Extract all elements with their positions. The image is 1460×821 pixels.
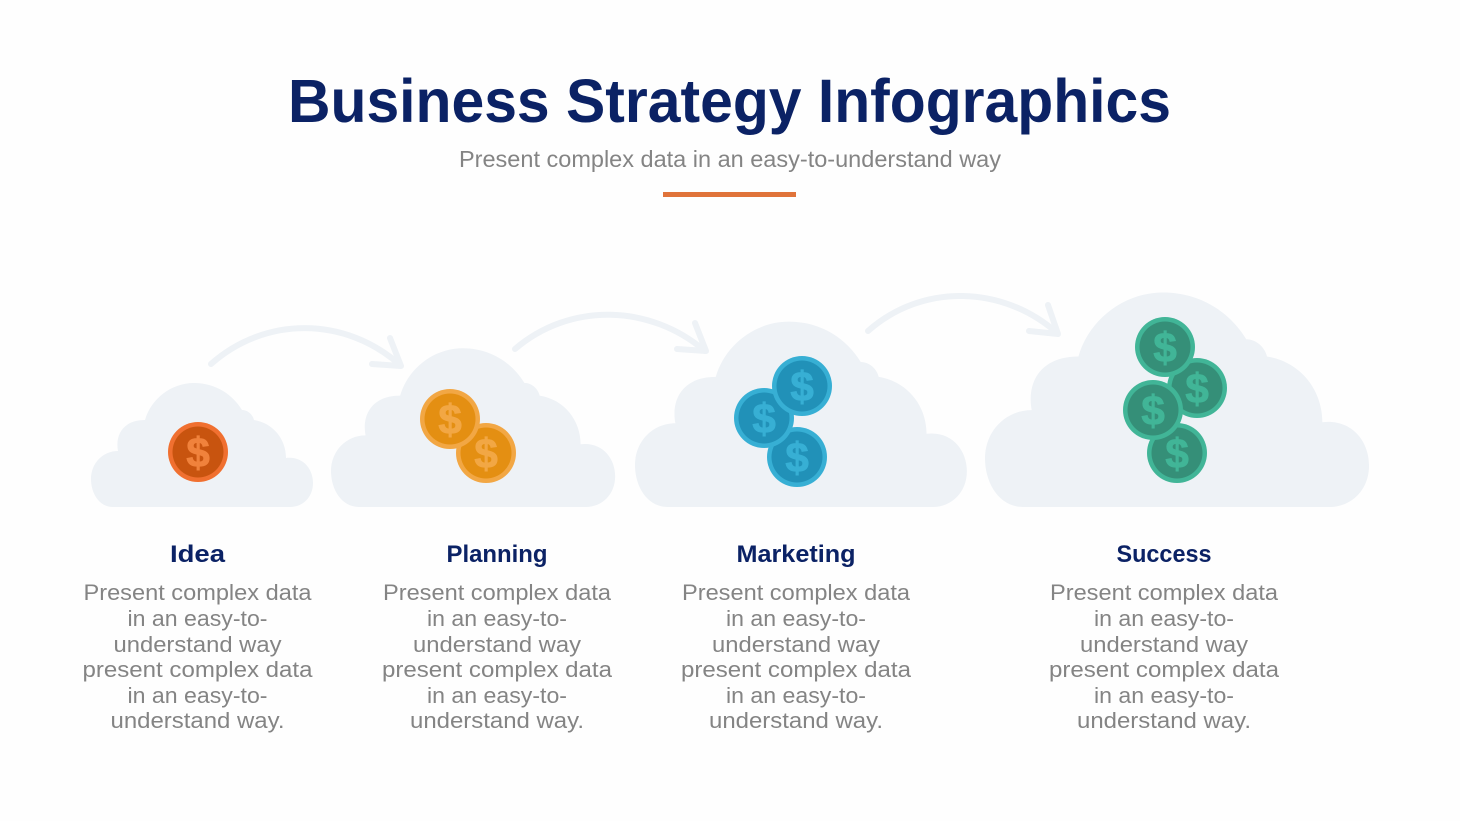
cloud: marketing (635, 322, 967, 507)
icon: four green coins: $ (1141, 387, 1165, 434)
icon: orange coin (168, 422, 228, 482)
icon: orange coin: $ (186, 429, 210, 476)
icon: three blue coins: $ (785, 434, 809, 481)
text block: Planning: understand way. (410, 708, 584, 733)
text block: Marketing: present complex data (681, 657, 912, 682)
text block: Success: understand way (1080, 632, 1248, 657)
cloud: planning (331, 348, 615, 507)
text block: Planning: in an easy-to- (427, 683, 567, 708)
icon: two yellow coins (420, 389, 516, 483)
icon: three blue coins: $ (790, 363, 814, 410)
text block: Planning: Present complex data (383, 580, 612, 605)
text block: Planning: present complex data (382, 657, 613, 682)
text block: Success: in an easy-to- (1094, 606, 1234, 631)
text block: Marketing: in an easy-to- (726, 606, 866, 631)
icon: two yellow coins: $ (474, 430, 498, 477)
arrow: planning to marketing (515, 315, 706, 351)
text block: Success: understand way. (1077, 708, 1251, 733)
text block: Success: present complex data (1049, 657, 1280, 682)
text block: Idea: understand way (114, 632, 282, 657)
icon: four green coins: $ (1185, 365, 1209, 412)
cloud: success (985, 292, 1369, 507)
text block: Planning (382, 580, 613, 733)
text block: Idea (82, 580, 313, 733)
text block: Idea: understand way. (110, 708, 284, 733)
arrow: idea to planning (211, 328, 401, 366)
icon: four green coins (1123, 317, 1227, 483)
heading: Marketing: Marketing (736, 541, 856, 568)
text block: Marketing: understand way. (709, 708, 883, 733)
text block: Success (1049, 580, 1280, 733)
text block: Success: Present complex data (1050, 580, 1279, 605)
arrow: marketing to success (868, 296, 1058, 334)
heading: Idea: Idea (170, 541, 226, 568)
title: Business Strategy Infographics (288, 67, 1171, 135)
text block: Marketing (681, 580, 912, 733)
text block: Idea: in an easy-to- (128, 606, 268, 631)
text block: Planning: in an easy-to- (427, 606, 567, 631)
cloud: idea (91, 383, 313, 507)
text block: Marketing: in an easy-to- (726, 683, 866, 708)
text block: Success: in an easy-to- (1094, 683, 1234, 708)
text block: Idea: present complex data (82, 657, 313, 682)
text block: Marketing: understand way (712, 632, 880, 657)
icon: three blue coins (734, 356, 832, 487)
text block: Planning: understand way (413, 632, 581, 657)
subtitle: Present complex data in an easy-to-understand way (459, 146, 1002, 172)
icon: three blue coins: $ (752, 395, 776, 442)
title underline (663, 192, 796, 197)
heading: Planning: Planning (446, 541, 548, 568)
text block: Idea: in an easy-to- (128, 683, 268, 708)
icon: two yellow coins: $ (438, 396, 462, 443)
icon: four green coins: $ (1153, 324, 1177, 371)
icon: four green coins: $ (1165, 430, 1189, 477)
text block: Idea: Present complex data (84, 580, 312, 605)
heading: Success: Success (1116, 541, 1212, 568)
text block: Marketing: Present complex data (682, 580, 911, 605)
